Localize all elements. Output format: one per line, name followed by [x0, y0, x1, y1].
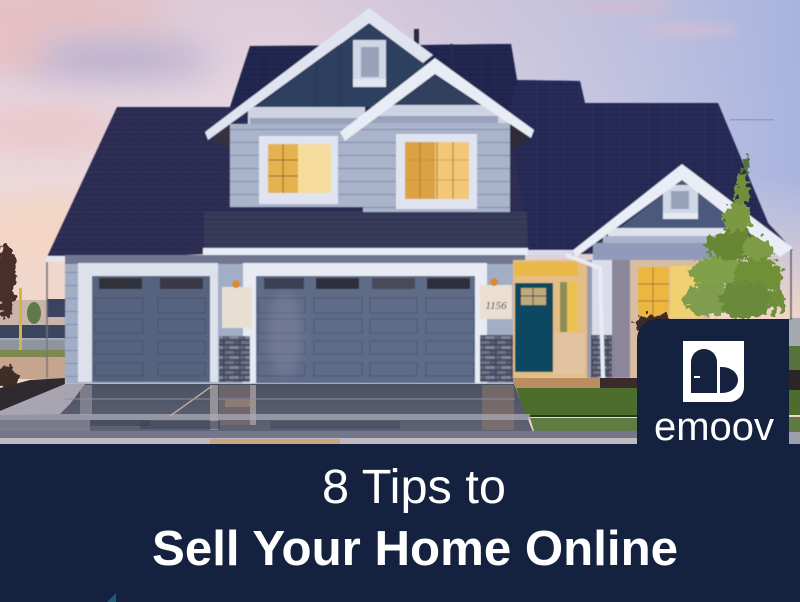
right background with lawn and fence [789, 318, 800, 432]
curb and street [0, 431, 800, 444]
left dormer with lit window [230, 124, 364, 207]
front entry with teal door [513, 260, 587, 378]
logo wordmark: emoov [654, 405, 774, 449]
walkway and lawn [513, 378, 640, 431]
left garage door [78, 263, 218, 382]
ground floor wall [65, 255, 525, 384]
lanterns and stone bases [219, 278, 515, 382]
photo background: sky [0, 0, 800, 445]
icon: door logo mark [683, 341, 744, 402]
gravel bed [0, 378, 65, 411]
title line two: Sell Your Home Online [152, 522, 678, 576]
front tree [684, 155, 785, 320]
center dormer with lit window [363, 75, 529, 212]
emoov logo card [637, 319, 789, 449]
porch column and right wall [566, 255, 710, 380]
house: roof [47, 29, 793, 262]
wet driveway [0, 384, 533, 432]
next-section arrow tip [107, 593, 116, 602]
right garage door [243, 263, 487, 383]
title line one: 8 Tips to [322, 461, 506, 514]
shrub by the porch [635, 313, 673, 337]
gutters [46, 248, 791, 378]
title banner [0, 444, 800, 602]
left tree and shrub [0, 242, 18, 391]
porch gable with vent [572, 164, 793, 260]
lanterns and stone bases: 1156 [485, 300, 507, 312]
upper gable with vent [212, 23, 425, 148]
distant neighbourhood on the left [0, 288, 66, 379]
gable trim [205, 8, 534, 141]
